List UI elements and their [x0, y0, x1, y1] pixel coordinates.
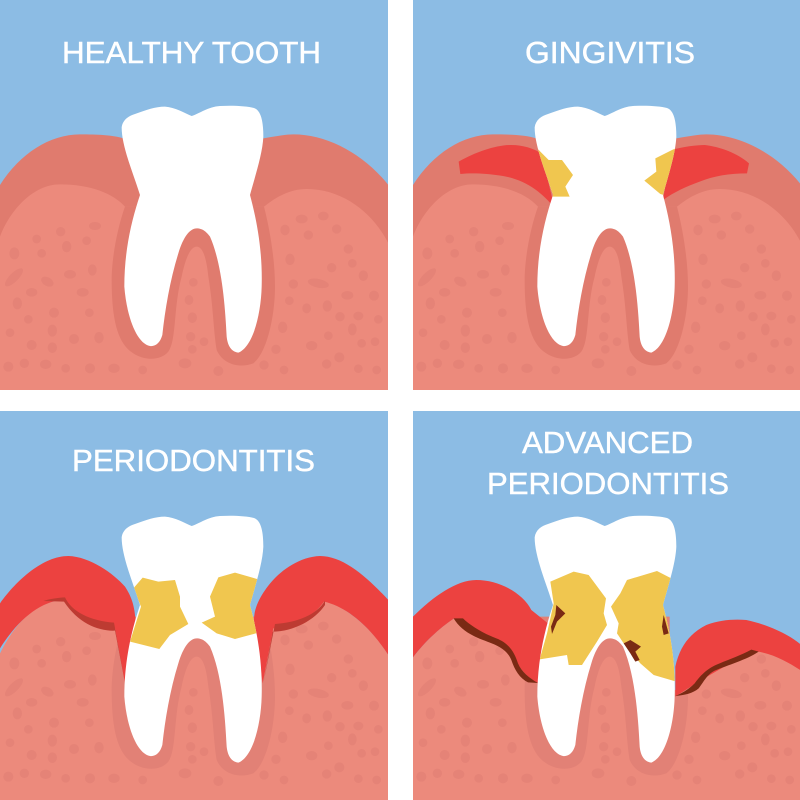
title line one: ADVANCED — [522, 425, 693, 460]
swollen gum right — [254, 556, 388, 683]
jaw bone — [413, 184, 800, 390]
panel: periodontitis — [0, 411, 388, 800]
jaw bone — [0, 184, 388, 390]
tooth socket — [112, 207, 275, 365]
panel: healthy tooth — [0, 0, 388, 390]
receding gum left — [413, 580, 548, 683]
plaque and decay — [540, 571, 680, 683]
tooth — [535, 516, 676, 763]
panel: gingivitis — [413, 0, 800, 390]
decay right — [662, 615, 669, 635]
title line two: PERIODONTITIS — [487, 466, 729, 501]
inflamed gum left — [458, 145, 552, 203]
tooth socket — [525, 617, 688, 775]
tooth — [122, 106, 263, 353]
jaw bone — [0, 600, 388, 800]
exposed root gap — [670, 613, 696, 690]
jaw bone — [413, 619, 800, 800]
tooth socket — [112, 617, 275, 775]
plaque — [130, 573, 258, 649]
panel: advanced periodontitis — [413, 411, 800, 800]
receded pocket right — [263, 601, 325, 683]
swollen gum left — [0, 556, 136, 683]
panel background — [0, 0, 388, 185]
receded pocket left — [44, 597, 124, 674]
tooth — [535, 106, 676, 353]
bone texture — [2, 212, 383, 376]
healthy gum — [0, 134, 388, 242]
plaque left — [540, 572, 607, 665]
gum — [413, 134, 800, 240]
tooth — [122, 516, 263, 763]
title: periodontitis: PERIODONTITIS — [72, 443, 315, 478]
bone texture — [415, 622, 796, 786]
periodontitis illustration — [0, 516, 388, 800]
bone texture — [2, 622, 383, 786]
inflamed gum right — [663, 145, 749, 200]
bone texture — [415, 212, 796, 376]
panel background — [413, 0, 800, 185]
receding gum right — [675, 620, 800, 697]
decay centre — [624, 640, 641, 662]
plaque right — [644, 148, 675, 195]
panel background — [0, 411, 388, 654]
advanced periodontitis illustration — [413, 516, 800, 800]
title: healthy tooth: HEALTHY TOOTH — [62, 35, 321, 70]
title: gingivitis: GINGIVITIS — [525, 35, 695, 70]
decay left — [551, 605, 565, 634]
plaque right — [202, 573, 258, 639]
panel background — [413, 411, 800, 658]
healthy tooth illustration — [0, 106, 388, 390]
tartar line right — [675, 650, 759, 696]
plaque — [536, 147, 680, 197]
plaque left — [130, 578, 188, 649]
plaque right — [611, 571, 680, 683]
tartar line left — [454, 618, 538, 683]
gingivitis illustration — [413, 106, 800, 390]
tooth socket — [525, 207, 688, 365]
plaque left — [536, 147, 573, 197]
title: advanced periodontitis — [487, 425, 729, 501]
